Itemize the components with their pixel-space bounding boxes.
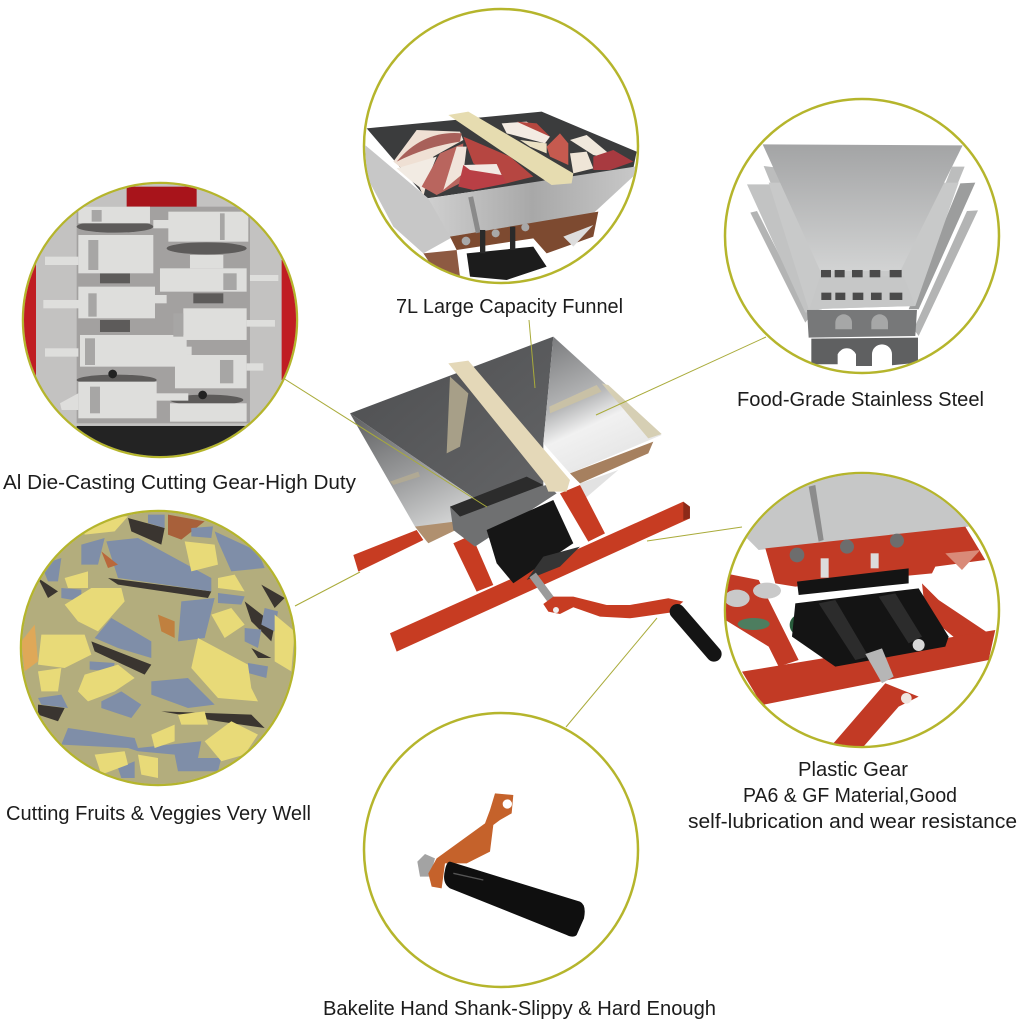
heading: cutting fruit: Cutting Fruits & Veggies Very Well xyxy=(6,803,311,825)
front legs xyxy=(453,535,493,592)
panel: plastic gear detail circle xyxy=(724,470,999,748)
panel: funnel detail circle xyxy=(364,9,638,283)
panel: cutting gear detail circle xyxy=(20,180,305,465)
heading: cutting gear: Al Die-Casting Cutting Gear-High Duty xyxy=(3,472,356,494)
heading: funnel: 7L Large Capacity Funnel xyxy=(396,296,623,318)
text: plastic gear: Plastic Gear xyxy=(798,759,908,781)
heading: handle: Bakelite Hand Shank-Slippy & Hard Enough xyxy=(323,998,716,1020)
panel: cut fruit detail circle xyxy=(18,508,300,790)
steel underside xyxy=(580,470,618,500)
hopper rim xyxy=(570,442,653,483)
wood bar xyxy=(448,361,570,492)
gear housing xyxy=(450,485,557,547)
text: plastic gear: PA6 & GF Material,Good xyxy=(743,785,957,807)
panel: stainless steel detail circle xyxy=(725,99,999,373)
crank handle xyxy=(677,612,714,654)
blue-grey chunks xyxy=(38,515,278,778)
back frame bar xyxy=(353,530,423,572)
front frame bar xyxy=(390,502,690,652)
text: plastic gear xyxy=(688,759,1017,833)
apple pulp xyxy=(38,515,295,778)
heading: stainless steel: Food-Grade Stainless Steel xyxy=(737,389,984,411)
dark gaps xyxy=(38,518,285,728)
panel: handle detail circle xyxy=(364,713,638,987)
hopper interior xyxy=(350,337,553,507)
product: fruit crusher xyxy=(350,337,714,654)
dark gear gaps xyxy=(77,221,247,405)
cutter shadows xyxy=(85,210,237,413)
leader lines xyxy=(283,320,766,727)
shaft xyxy=(533,575,551,599)
text: plastic gear: self-lubrication and wear resistance xyxy=(688,811,1017,833)
crank arm xyxy=(543,597,683,618)
cutter blocks xyxy=(43,207,278,422)
